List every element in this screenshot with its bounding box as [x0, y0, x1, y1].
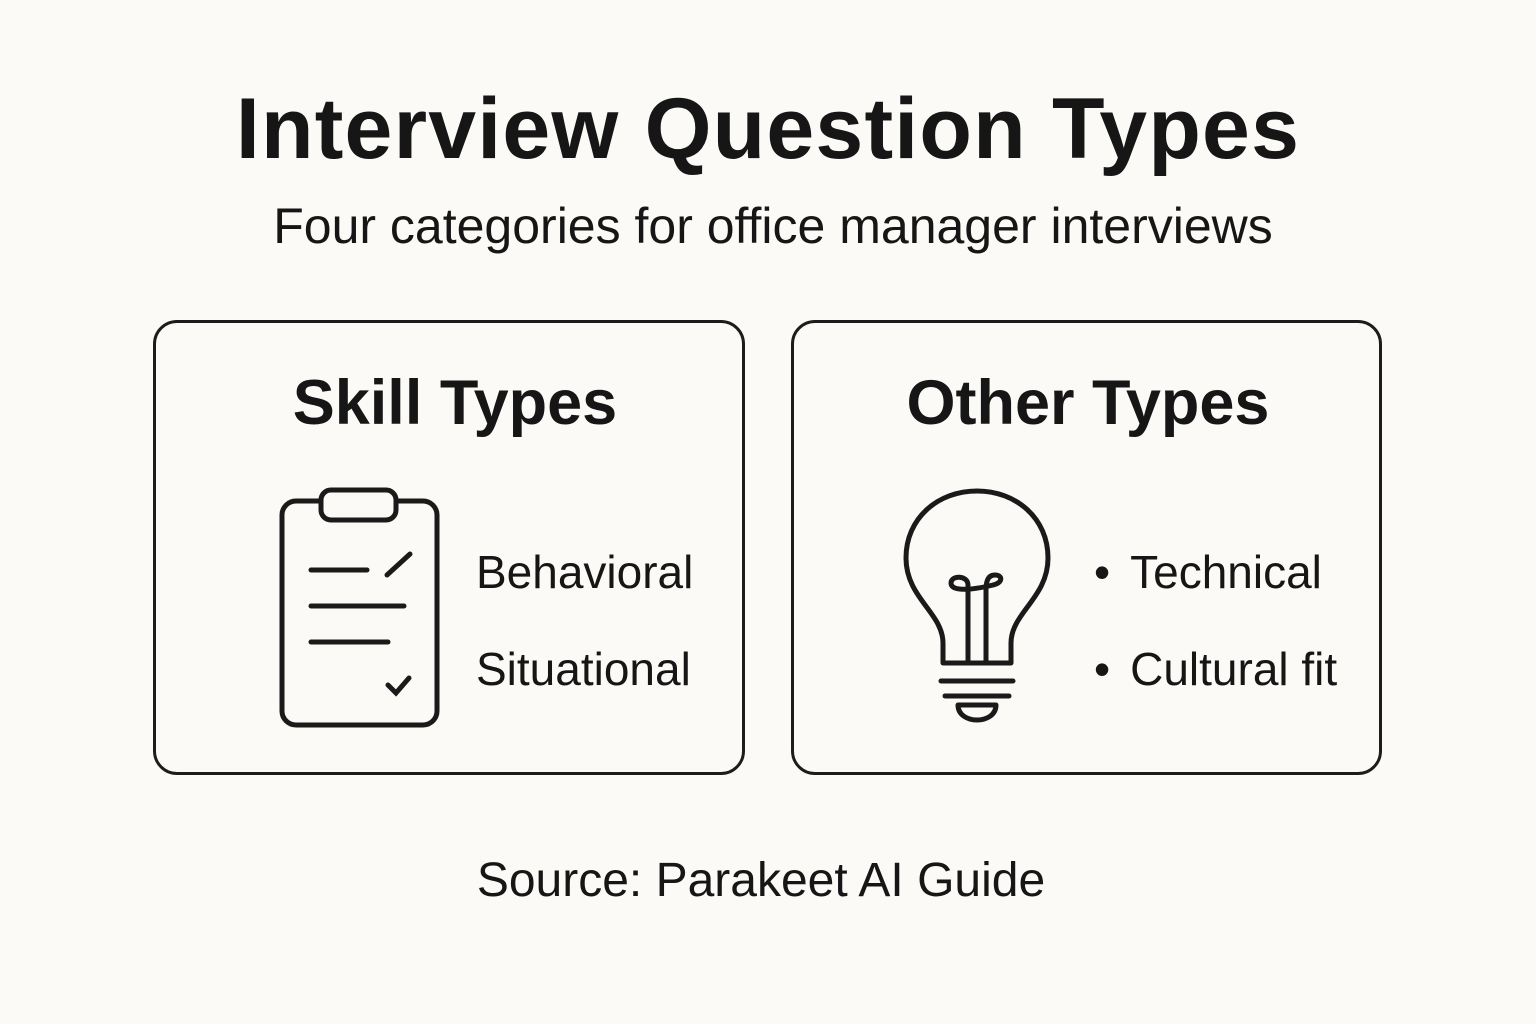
panel: other types: • Cultural fit: [1094, 643, 1337, 695]
subtitle: Four categories for office manager interviews: [273, 198, 1273, 254]
panel heading: other types: Other Types: [907, 368, 1269, 438]
icon: clipboard: [280, 488, 440, 728]
list: other types: [1094, 546, 1337, 695]
panel: skill types: [153, 320, 745, 775]
source note: Source: Parakeet AI Guide: [477, 854, 1045, 907]
panel: other types: • Technical: [1094, 546, 1322, 598]
title: Interview Question Types: [236, 81, 1300, 177]
panel: other types: [791, 320, 1382, 775]
list: skill types: [476, 546, 693, 695]
icon: light bulb: [904, 488, 1050, 722]
panel heading: skill types: Skill Types: [293, 368, 617, 438]
panel: skill types: Behavioral: [476, 546, 693, 598]
panel: skill types: Situational: [476, 643, 691, 695]
